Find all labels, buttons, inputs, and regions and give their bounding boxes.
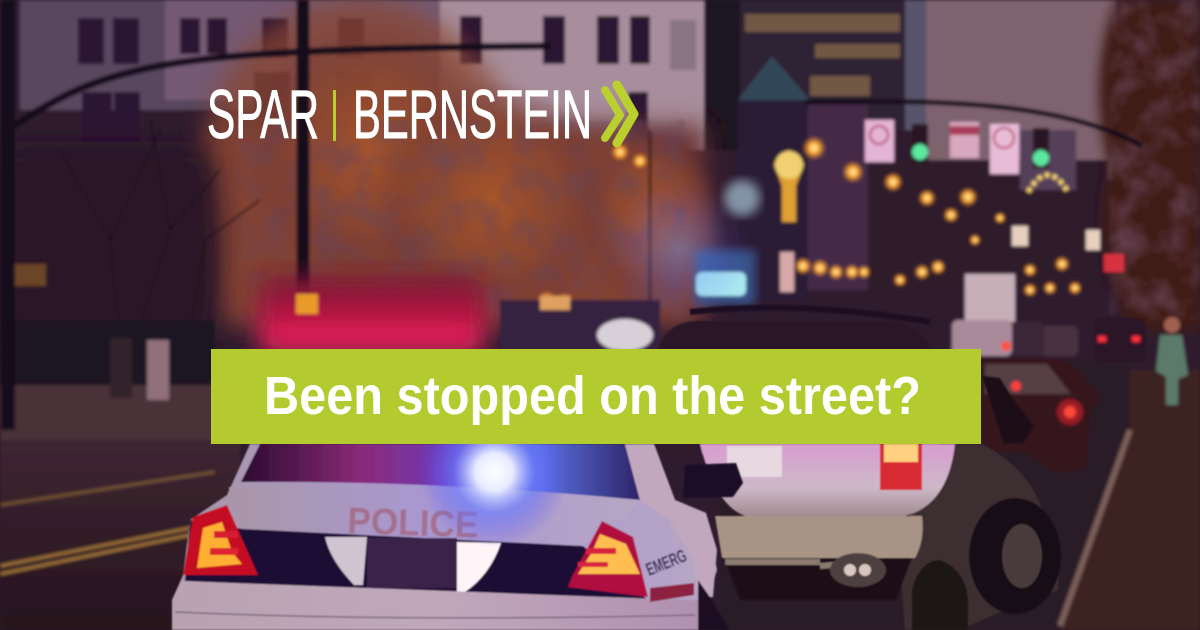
mid street buildings	[738, 56, 1108, 300]
bare tree branches	[60, 120, 260, 340]
SUV wheels	[969, 498, 1061, 614]
logo chevrons	[605, 85, 634, 143]
logo: Spar Bernstein	[207, 76, 634, 153]
road lane markings	[0, 472, 215, 574]
street signs and signal lights	[865, 120, 1049, 174]
EMERGENCY side lettering: EMERG	[643, 545, 689, 580]
police lights glow	[258, 180, 755, 354]
road	[0, 440, 240, 630]
roof light flare	[419, 397, 569, 547]
distant tower	[704, 0, 926, 150]
car body outline	[172, 444, 717, 630]
street lights and bokeh	[537, 136, 1124, 322]
logo wordmark right: BERNSTEIN	[353, 76, 592, 153]
left building	[20, 0, 705, 150]
SUV side body	[900, 444, 1059, 630]
logo wordmark left: SPAR	[207, 76, 319, 153]
SUV tailgate	[700, 444, 955, 516]
distant traffic	[110, 317, 1188, 472]
side mirror	[683, 463, 743, 498]
police car	[172, 397, 743, 630]
trunk lid	[229, 486, 640, 546]
dusk sky on right	[926, 0, 1116, 180]
logo divider	[333, 90, 336, 141]
POLICE trunk lettering: POLICE	[347, 500, 479, 546]
headline banner	[211, 349, 981, 444]
right tail light	[568, 521, 648, 597]
autumn trees	[0, 0, 1200, 340]
dark rear panel	[185, 520, 648, 600]
headline text: Been stopped on the street?	[264, 366, 921, 426]
sedan on right	[982, 358, 1100, 472]
rear window	[241, 444, 640, 500]
SUV stopped ahead	[658, 308, 1061, 630]
traffic poles and mast arms	[8, 0, 1142, 430]
license plate lights	[325, 537, 367, 585]
lower buildings and sidewalk	[14, 264, 46, 286]
side panel	[625, 444, 717, 597]
front wheel well	[698, 580, 729, 630]
pedestrian	[1156, 335, 1188, 405]
left tail light	[183, 505, 258, 575]
bumper	[172, 581, 700, 630]
